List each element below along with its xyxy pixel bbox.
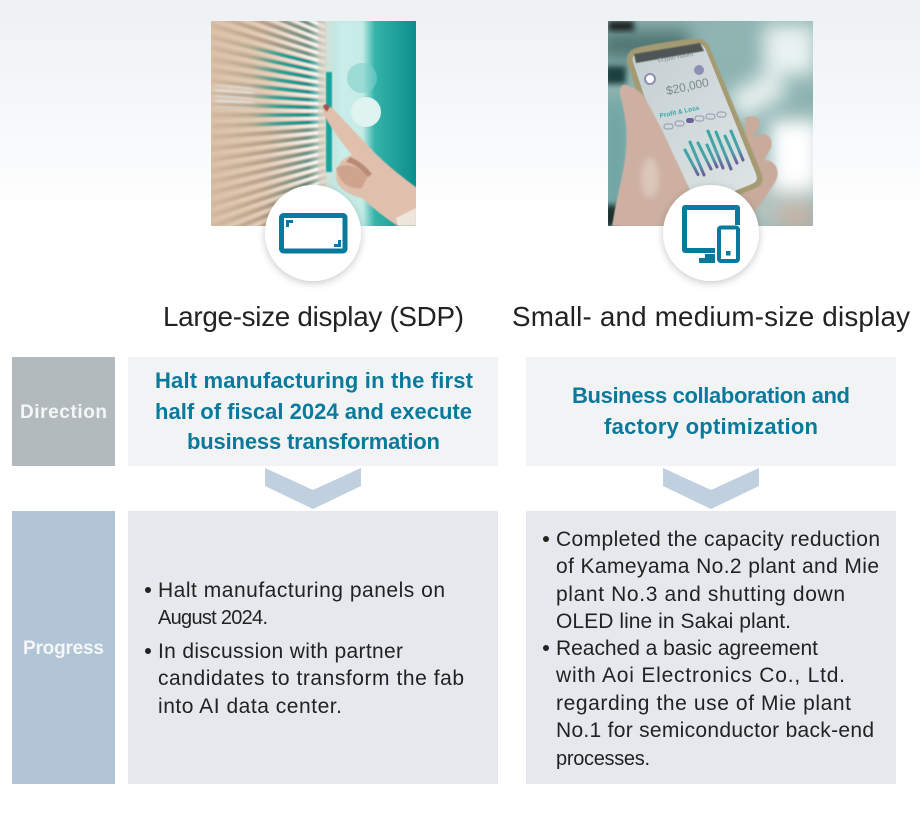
arrow: left — [265, 468, 361, 509]
fingers behind phone — [740, 116, 778, 211]
panel: small- and medium-size direction — [526, 357, 896, 466]
heading: large-size display: Large-size display (SDP) — [163, 301, 464, 332]
panel: large-size progress: August 2024. — [158, 607, 268, 629]
icon badge: monitor and tablet — [663, 185, 759, 281]
photo: hand holding smartphone: Crypto Wallet — [657, 52, 694, 64]
arrow: right — [663, 468, 759, 509]
panel: large-size progress — [128, 511, 498, 784]
page background — [0, 0, 920, 225]
panel: small- and medium-size progress — [526, 511, 896, 784]
panel: small- and medium-size progress: with Aoi Electronics Co., Ltd. — [555, 664, 845, 687]
panel: large-size direction: business transformation — [187, 429, 440, 454]
photo: hand holding smartphone: Profit & Loss — [659, 105, 700, 120]
panel: small- and medium-size progress: of Kameyama No.2 plant and Mie — [556, 555, 879, 578]
panel: small- and medium-size progress: Completed the capacity reduction — [556, 528, 880, 551]
panel: small- and medium-size direction: Business collaboration and — [572, 383, 850, 408]
panel: large-size direction — [128, 357, 498, 466]
hand — [612, 85, 691, 226]
photo: finger touching large display — [211, 21, 416, 226]
panel: small- and medium-size progress: Reached a basic agreement — [556, 637, 818, 660]
icon: monitor and tablet — [682, 205, 740, 263]
panel: large-size progress: Halt manufacturing panels on — [158, 579, 445, 602]
hand — [323, 104, 420, 226]
panel: large-size progress: candidates to transform the fab — [158, 667, 464, 690]
photo: hand holding smartphone — [608, 21, 813, 226]
panel: small- and medium-size progress: plant No.3 and shutting down — [556, 583, 845, 606]
panel: small- and medium-size direction: factory optimization — [604, 414, 818, 439]
panel: large-size direction: Halt manufacturing in the first — [155, 368, 474, 393]
panel: small- and medium-size progress: OLED line in Sakai plant. — [556, 610, 791, 633]
row label: progress — [12, 511, 115, 784]
icon: large display frame — [282, 216, 345, 251]
icon badge: large display — [265, 185, 361, 281]
row label: direction: Direction — [20, 402, 107, 423]
photo: hand holding smartphone: $20,000 — [665, 75, 710, 98]
panel: large-size progress: into AI data center. — [158, 695, 342, 718]
phone — [626, 38, 763, 195]
row label: progress: Progress — [23, 638, 104, 659]
row label: direction — [12, 357, 115, 466]
panel: small- and medium-size progress: No.1 for semiconductor back-end — [556, 719, 874, 742]
panel: large-size direction: half of fiscal 2024 and execute — [155, 399, 472, 424]
panel: small- and medium-size progress: processes. — [556, 748, 650, 770]
panel: large-size progress: In discussion with partner — [158, 640, 403, 663]
panel: small- and medium-size progress: regarding the use of Mie plant — [556, 692, 851, 715]
heading: small- and medium-size display: Small- and medium-size display — [512, 301, 910, 332]
